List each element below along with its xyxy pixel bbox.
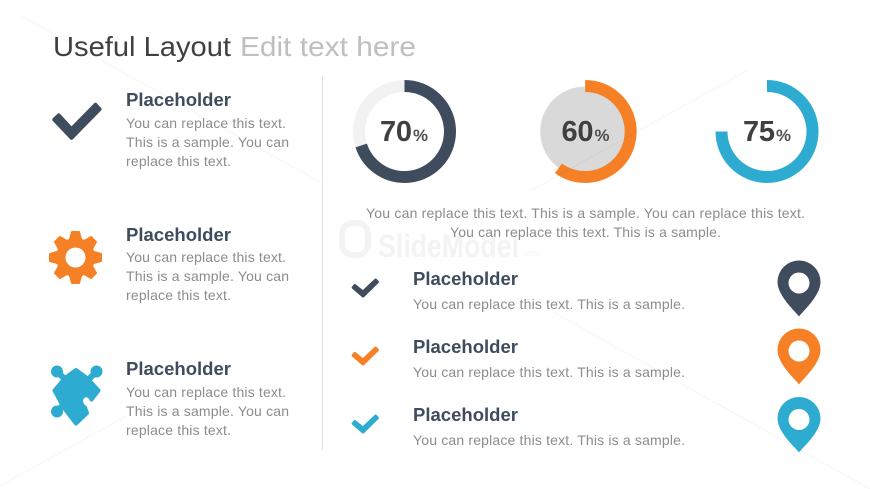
heading: left item 1: Placeholder [126,90,231,110]
icon: small blue check [353,416,377,432]
text block: left item 3: You can replace this text. [126,384,286,400]
panel: left item 3 [51,359,289,438]
title: Edit text here [240,31,416,62]
watermark: .com [522,249,540,258]
vertical divider [322,76,324,450]
text block: left item 2: You can replace this text. [126,249,286,265]
text block: left item 1 [126,115,289,169]
text: row 3: You can replace this text. This is a sample. [413,432,685,448]
text block: left item 3: replace this text. [126,422,231,438]
panel: left item 2 [50,225,289,303]
text block: left item 2 [126,249,289,303]
chart: 60% donut: % [594,126,610,145]
text block: left item 1: This is a sample. You can [126,134,289,150]
icon: orange gear [50,232,101,283]
text: row 1: You can replace this text. This is a sample. [413,296,685,312]
chart: 70% donut: % [413,126,428,145]
text block: left item 2: This is a sample. You can [126,268,289,284]
heading: row 1: Placeholder [413,269,518,289]
chart: 75% donut [722,86,812,177]
text block: center caption: You can replace this text. This is a sample. [450,224,721,240]
chart: 75% donut: % [776,126,791,145]
chart: 60% donut [540,86,631,177]
panel: list row 3 [353,397,821,452]
title: Useful Layout [53,31,231,62]
chart: 75% donut: 75 [743,116,775,148]
text: row 2: You can replace this text. This is a sample. [413,364,685,380]
heading: row 3: Placeholder [413,405,518,425]
text block: left item 1: You can replace this text. [126,115,286,131]
pin hole: dark [788,272,810,294]
chart: 60% donut: 60 [562,116,594,148]
pin hole: orange [788,340,810,362]
faint diagonal line [530,70,748,191]
icon: small dark check [353,280,377,296]
heading: left item 3: Placeholder [126,359,231,379]
text block: left item 3 [126,384,289,438]
pin hole: blue [788,409,810,430]
title [53,31,416,62]
text block: left item 1: replace this text. [126,153,231,169]
heading: left item 2: Placeholder [126,225,231,245]
heading: row 2: Placeholder [413,337,518,357]
icon: dark map pin [778,260,821,316]
icon: small orange check [353,348,377,364]
text block: left item 2: replace this text. [126,287,231,303]
chart: 70% donut [359,86,450,177]
watermark: SlideModel [378,228,519,264]
icon: dark check [54,105,100,138]
text block: center caption [366,205,805,240]
icon: orange map pin [778,328,821,384]
panel: list row 1 [353,260,821,316]
panel: left item 1 [54,90,289,169]
panel: list row 2 [353,328,821,384]
chart: 70% donut: 70 [380,116,412,148]
icon: blue puzzle piece [51,366,102,424]
icon: blue map pin [778,397,821,452]
text block: left item 3: This is a sample. You can [126,403,289,419]
text block: center caption: You can replace this text. This is a sample. You can replace this text. [366,205,805,221]
